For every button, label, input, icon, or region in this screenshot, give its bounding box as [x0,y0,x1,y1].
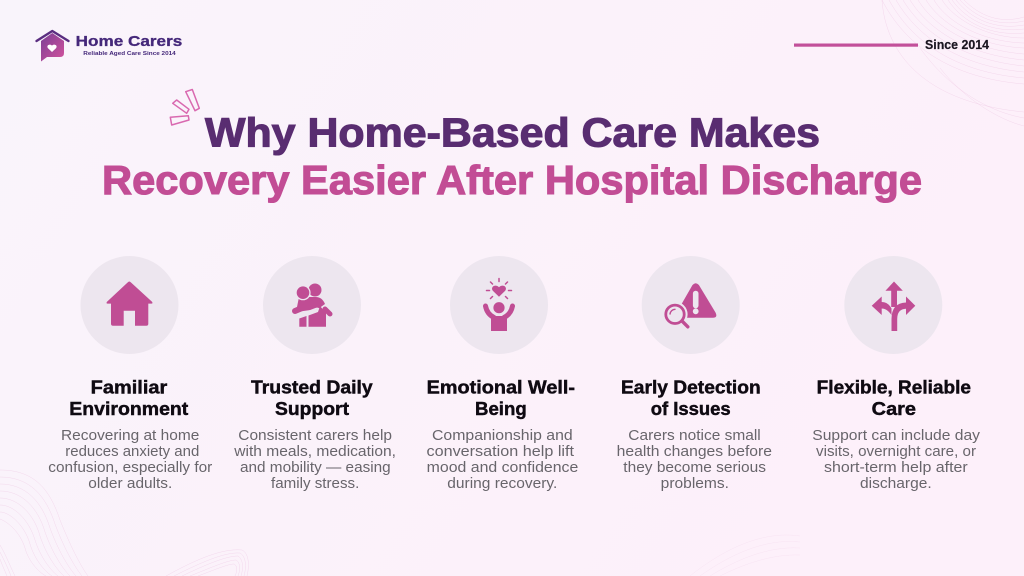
heading: Flexible, Reliable [817,376,971,397]
body text: Recovering at home [61,427,199,444]
panel: trusted daily support [233,256,396,492]
title line 1: Why Home-Based Care Makes [205,110,820,156]
panel: familiar environment [48,256,212,492]
body text: health changes before [617,443,772,460]
heading [69,376,188,419]
accent line [794,44,918,47]
body text [233,427,396,492]
since badge [794,37,990,52]
body text [48,427,212,492]
icon: warning and magnifier [642,256,740,354]
decorative wave: bottom left [0,470,88,576]
logo tagline: Reliable Aged Care Since 2014 [83,51,177,57]
logo icon: house with heart [36,31,68,62]
icon: branching arrows [844,256,942,354]
title [102,110,922,203]
body text [426,427,578,492]
since label: Since 2014 [925,37,990,52]
body text [812,427,981,492]
body text: visits, overnight care, or [816,443,976,460]
panel: emotional well-being [426,256,578,492]
heading: Early Detection [621,376,761,397]
heading: Environment [69,398,188,419]
body text: reduces anxiety and [65,443,199,460]
decorative wave: top right [882,0,1024,126]
heading: Support [275,398,349,419]
body text: during recovery. [447,475,557,492]
body text: confusion, especially for [48,459,212,476]
body text: with meals, medication, [233,443,396,460]
icon: embracing people [263,256,361,354]
icon: spark accent [170,90,199,125]
heading: Being [475,398,527,419]
heading [817,376,971,419]
body text: Carers notice small [628,427,761,444]
body text: discharge. [860,475,932,492]
heading: Emotional Well- [427,376,575,397]
body text: conversation help lift [426,443,575,460]
logo name: Home Carers [76,33,182,50]
body text: they become serious [623,459,766,476]
body text: family stress. [271,475,359,492]
icon: house [80,256,178,354]
icon: person with heart [450,256,548,354]
heading [621,376,761,419]
body text: problems. [661,475,729,492]
heading [251,376,373,419]
heading: of Issues [651,398,731,419]
panel: early detection of issues [617,256,772,492]
title line 2: Recovery Easier After Hospital Discharge [102,157,922,203]
body text [617,427,772,492]
body text: short-term help after [824,459,968,476]
body text: Companionship and [432,427,573,444]
body text: older adults. [88,475,172,492]
heading: Familiar [91,376,167,397]
panel: flexible reliable care [812,256,981,492]
decorative wave: bottom centre right [690,535,800,576]
heading: Care [872,398,916,419]
heading [427,376,575,419]
heading: Trusted Daily [251,376,373,397]
body text: Support can include day [812,427,981,444]
body text: mood and confidence [427,459,578,476]
logo: Home Carers [36,31,182,62]
body text: Consistent carers help [238,427,392,444]
decorative wave: bottom centre left [166,550,248,576]
body text: and mobility — easing [240,459,391,476]
